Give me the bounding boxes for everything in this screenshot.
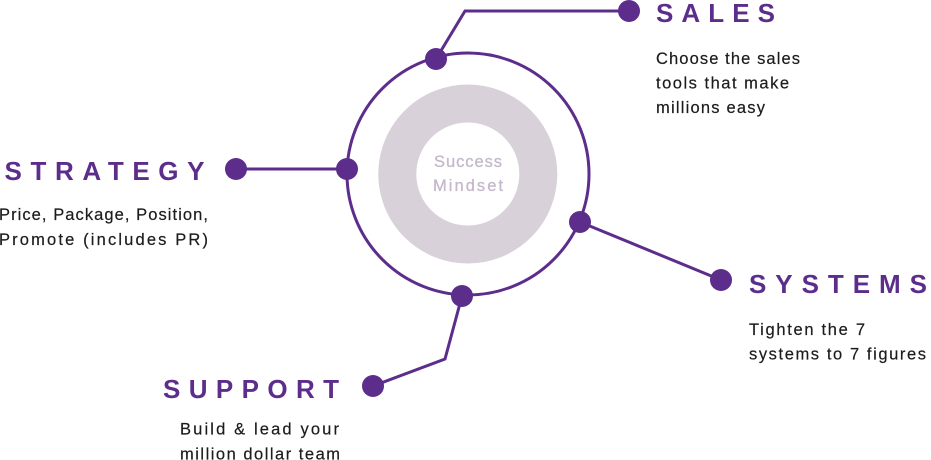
center label: Mindset [433,177,503,195]
branch: systems: Tighten the 7 [749,321,865,339]
center label [433,153,503,195]
branch: sales: Choose the sales [656,50,800,68]
center label: Success [434,153,502,171]
branch: systems [569,211,927,364]
branch: systems: systems to 7 figures [749,346,926,364]
branch: support: Build & lead your [180,420,340,438]
branch: support [163,285,473,460]
branch: support: SUPPORT [163,374,339,404]
branch: sales [425,0,800,117]
branch: strategy: STRATEGY [4,156,204,186]
branch: strategy: Promote (includes PR) [0,231,208,249]
inner donut [397,104,538,244]
branch: sales: millions easy [656,99,766,117]
branch: systems: SYSTEMS [749,269,927,299]
branch: strategy: Price, Package, Position, [0,206,208,224]
outer ring [347,53,589,295]
branch: strategy [0,156,358,249]
branch: sales: tools that make [656,74,789,92]
